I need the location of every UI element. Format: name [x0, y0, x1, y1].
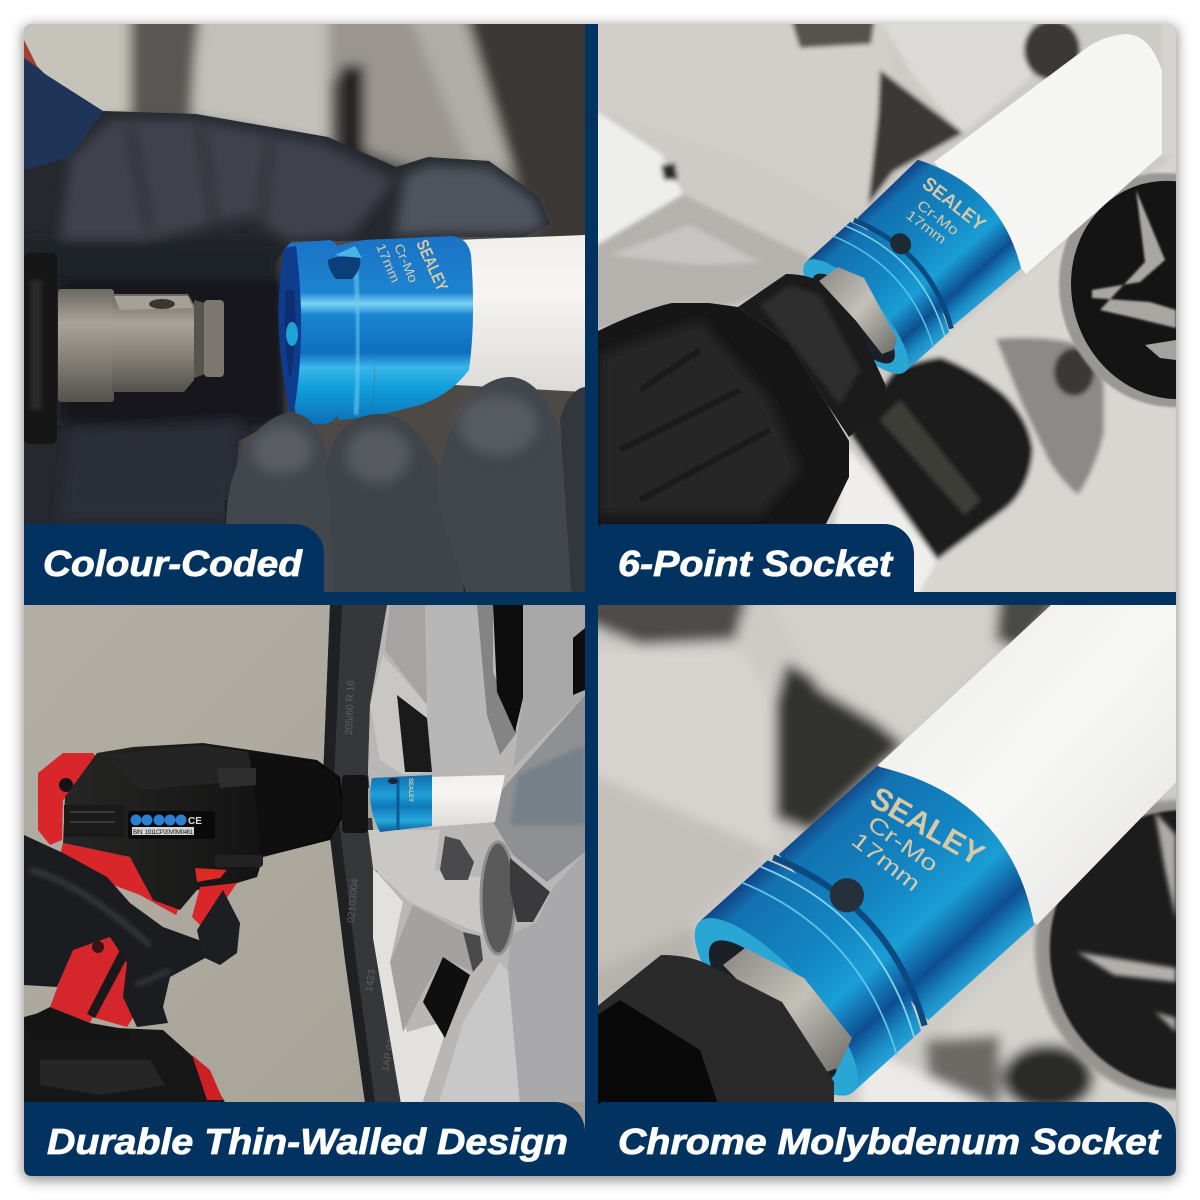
glove: [24, 835, 207, 1027]
background wheel spokes: [590, 16, 1190, 606]
tyre sidewall text: 02103004: [346, 878, 361, 923]
trigger red and handle: [195, 868, 227, 882]
battery base: [24, 1010, 225, 1102]
label: Durable Thin-Walled Design: [24, 1102, 585, 1176]
label: Colour-Coded: [24, 524, 324, 592]
impact driver nose: [590, 955, 834, 1110]
glove folds and shading: [24, 120, 545, 520]
alloy wheel: [368, 605, 585, 1110]
white tube: [427, 775, 505, 827]
engraved text: Cr-Mo: [914, 197, 962, 238]
red rear cap: [38, 753, 95, 845]
background wheel: [24, 24, 585, 471]
tyre sidewall text: 1423: [364, 968, 378, 992]
blue socket: [279, 236, 473, 424]
impact driver: [590, 274, 886, 530]
impact wrench: [24, 743, 368, 1102]
white tube: [934, 34, 1162, 274]
socket: [366, 775, 432, 832]
blue socket: Cr-Mo: [391, 241, 421, 285]
engraved text: [906, 178, 988, 244]
anvil shaft: [819, 267, 897, 354]
socket: SEALEY: [407, 778, 413, 802]
sleeve: [24, 54, 103, 170]
lower lever: [215, 855, 263, 867]
label: 6-Point Socket: 6-Point Socket: [618, 543, 894, 584]
engraved text: SEALEY: [864, 780, 991, 873]
spec label: [128, 811, 215, 839]
forearm glove: [24, 111, 550, 524]
engraved text: [847, 780, 991, 896]
engraved text: 17mm: [847, 827, 925, 896]
label: Chrome Molybdenum Socket: [598, 1102, 1176, 1176]
background wheel: [598, 605, 1176, 1176]
hub and tyre: [1058, 172, 1176, 408]
side latch: [64, 805, 104, 837]
engraved text: Cr-Mo: [863, 811, 943, 877]
anvil shaft: [723, 948, 852, 1072]
label: 6-Point Socket: [598, 524, 914, 592]
engraved text: SEALEY: [918, 173, 989, 236]
fingers: [225, 377, 585, 600]
tyre sidewall text: 205/60 R 16: [344, 680, 357, 735]
tyre sidewall text: [345, 680, 392, 1072]
panel: 6-point socket: [590, 16, 1200, 606]
white tube: [455, 235, 585, 392]
blue socket: 17mm: [373, 241, 403, 285]
engraved text: SEALEY: [412, 237, 452, 294]
red body: [60, 843, 186, 915]
tyre: [324, 605, 401, 1102]
engraved text: 17mm: [903, 207, 950, 247]
panel: chrome molybdenum socket: [598, 605, 1176, 1176]
label: Colour-Coded: Colour-Coded: [43, 543, 303, 584]
impact driver anvil: [24, 253, 224, 444]
white tube: [878, 605, 1176, 925]
label: Chrome Molybdenum Socket: Chrome Molybdenum Socket: [618, 1121, 1162, 1162]
label: Durable Thin-Walled Design: Durable Thin-Walled Design: [47, 1121, 568, 1162]
panel: durable thin-walled design: [24, 605, 585, 1176]
spec label: B/N: 1911CP20V0M0481: [133, 830, 194, 836]
blue socket: [671, 734, 1061, 1118]
hub and tyre: [1032, 798, 1176, 1102]
panel: colour-coded: [24, 24, 585, 592]
nose: [342, 775, 368, 833]
spec label: CE: [188, 816, 202, 827]
black housing: [63, 743, 345, 910]
floor: [24, 605, 585, 1176]
tyre sidewall text: 1AP 0325CH: [380, 1013, 403, 1073]
blue socket: [803, 160, 1022, 374]
